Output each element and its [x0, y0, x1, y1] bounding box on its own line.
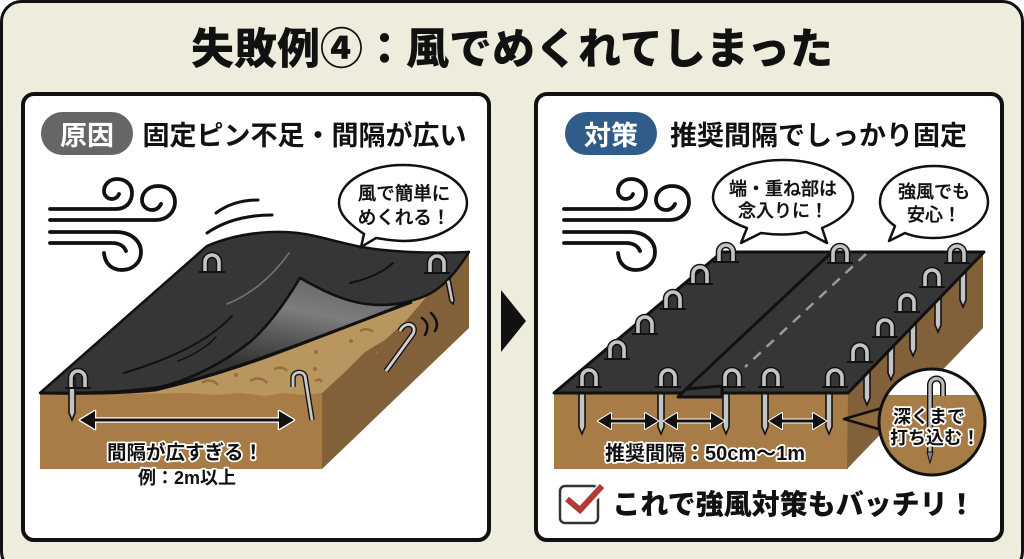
speech bubble: edges and overlaps: 端・重ね部は	[729, 179, 837, 199]
tarp creases	[124, 253, 393, 373]
cause heading: 固定ピン不足・間隔が広い	[142, 120, 466, 151]
icon: wind	[50, 179, 175, 270]
motion lines	[207, 200, 272, 233]
speech bubble: safe in strong wind	[880, 166, 988, 241]
icon: checkbox	[560, 486, 603, 523]
countermeasure badge: 対策	[584, 121, 638, 151]
soil block	[554, 252, 983, 469]
detail text: 深くまで	[893, 407, 965, 427]
speech bubble: safe in strong wind: 安心！	[907, 205, 961, 225]
speech bubble: edges and overlaps: 念入りに！	[738, 201, 828, 221]
detail circle: 打ち込む！	[890, 428, 980, 448]
seam dashes	[745, 254, 866, 367]
panel: cause	[23, 94, 489, 540]
speech bubble: edges and overlaps	[713, 160, 853, 243]
vibration marks	[422, 313, 437, 335]
deep pin	[930, 378, 943, 452]
spacing label: 間隔が広すぎる！	[107, 441, 263, 464]
side stems	[864, 265, 966, 405]
loose pin	[293, 372, 312, 420]
cause badge: 原因	[60, 121, 114, 151]
spacing label	[107, 441, 263, 488]
conclusion text: これで強風対策もバッチリ！	[612, 489, 976, 520]
speech bubble: easily lifted	[339, 165, 467, 247]
speech bubble: easily lifted: 風で簡単に	[358, 183, 450, 204]
soil block	[40, 250, 469, 469]
pulled pin	[386, 324, 414, 371]
speech bubble: safe in strong wind: 強風でも	[898, 182, 970, 202]
cause badge	[41, 112, 133, 155]
title: 失敗例④：風でめくれてしまった	[191, 26, 833, 74]
tarp edge	[40, 302, 412, 393]
panel: countermeasure	[536, 94, 1002, 540]
detail circle	[844, 368, 986, 476]
icon: wind	[564, 179, 689, 270]
tarp underside	[158, 278, 410, 389]
spacing label: 例：2m以上	[138, 468, 236, 488]
countermeasure heading: 推奨間隔でしっかり固定	[670, 121, 967, 151]
overlap seam	[678, 252, 832, 397]
pins	[576, 245, 970, 387]
soil clods	[202, 329, 373, 385]
tarp	[554, 252, 984, 397]
spacing arrow	[80, 411, 294, 429]
arrow between panels	[501, 290, 526, 352]
spacing label: 推奨間隔：50cm〜1m	[605, 442, 805, 465]
pins	[65, 255, 454, 420]
countermeasure badge	[565, 112, 657, 155]
front stems	[579, 392, 832, 434]
spacing arrows	[598, 413, 826, 429]
tarp	[40, 232, 469, 393]
speech bubble: easily lifted: めくれる！	[358, 207, 450, 228]
